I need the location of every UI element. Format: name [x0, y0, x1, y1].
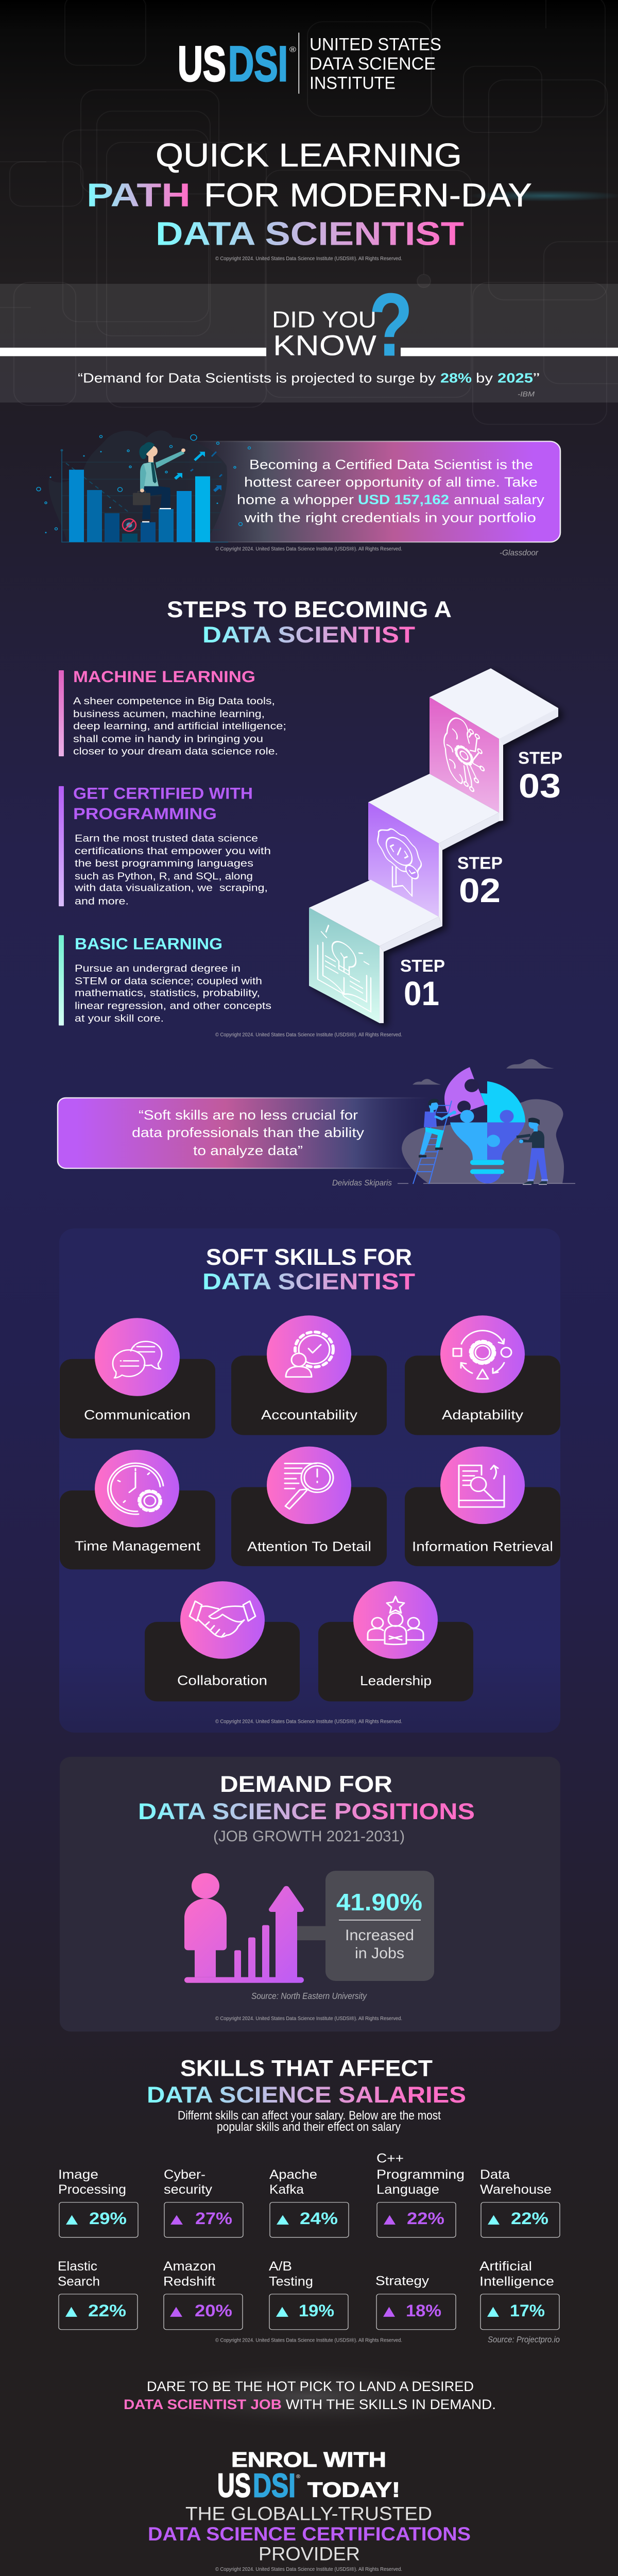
stat box: in Jobs: [355, 1944, 404, 1962]
skill: artificial intelligence 17%: [479, 2260, 559, 2330]
icon: clock with gear: [108, 1463, 163, 1514]
copyright: © Copyright 2024. United States Data Science Institute (USDSI®). All Rights Reserved.: [215, 2566, 402, 2572]
card: time management: [60, 1450, 215, 1569]
icon: brain circuit: [444, 710, 484, 798]
skill: elastic search 22%: 22%: [88, 2302, 126, 2320]
card: adaptability: [405, 1315, 560, 1435]
skill: artificial intelligence 17%: Intelligence: [479, 2275, 554, 2289]
skill: c++ programming language 22%: 22%: [407, 2210, 444, 2228]
person standing: [517, 1118, 548, 1184]
text block: machine learning: [59, 667, 286, 757]
skill: artificial intelligence 17%: 17%: [510, 2302, 545, 2320]
step 01 block: [309, 880, 442, 1023]
skill: c++ programming language 22%: [376, 2152, 465, 2238]
text block: machine learning: A sheer competence in Big Data tools,: [73, 696, 275, 707]
skill: c++ programming language 22%: Programming: [376, 2168, 465, 2182]
panel: certified data scientist callout: [182, 442, 560, 542]
icon: gear with cycle arrows: [453, 1331, 511, 1379]
callout: dare to be the hot pick: DARE TO BE THE HOT PICK TO LAND A DESIRED: [147, 2379, 474, 2394]
card: information retrieval: [405, 1447, 560, 1566]
institute name: [310, 35, 441, 93]
callout: dare to be the hot pick: DATA SCIENTIST JOB: [124, 2397, 282, 2412]
text block: get certified with programming: such as Python, R, and SQL, along: [75, 871, 253, 882]
heading: demand: [138, 1771, 475, 1824]
text block: basic learning: mathematics, statistics, probability,: [75, 988, 260, 998]
skill: a/b testing 19%: [269, 2260, 348, 2330]
icon: question mark: ?: [369, 275, 413, 375]
label: step 02: 02: [459, 871, 501, 909]
skill: data warehouse 22%: Warehouse: [480, 2183, 552, 2197]
heading: skills that affect salaries: DATA SCIENCE SALARIES: [147, 2082, 466, 2108]
heading: did you know: KNOW: [273, 330, 377, 362]
skill: data warehouse 22%: 22%: [511, 2210, 548, 2228]
logo mark: ®: [289, 46, 297, 54]
text block: machine learning: business acumen, machine learning,: [73, 709, 265, 720]
heading: soft skills for data scientist: [202, 1244, 415, 1294]
heading: did you know: [272, 307, 377, 362]
panel: demand for data science positions: [60, 1757, 560, 2031]
card: information retrieval: Information Retrieval: [412, 1539, 553, 1554]
illustration: puzzle light bulb: [398, 1059, 575, 1184]
text block: get certified with programming: the best programming languages: [75, 858, 253, 869]
skill: elastic search 22%: Search: [58, 2275, 100, 2289]
icon: team leader with star: [368, 1597, 423, 1645]
skill: cyber-security 27%: Cyber-: [164, 2168, 205, 2182]
title: FOR MODERN-DAY: [204, 177, 532, 214]
label: step 01: STEP: [400, 957, 445, 975]
panel: soft skills quote: [58, 1098, 432, 1168]
call to action: enrol with USDSI today: THE GLOBALLY-TRUSTED: [185, 2503, 432, 2524]
copyright: © Copyright 2024. United States Data Science Institute (USDSI®). All Rights Reserved.: [215, 2337, 402, 2343]
title: QUICK LEARNING: [156, 137, 462, 174]
heading: skills that affect salaries: [147, 2055, 466, 2108]
text block: basic learning: linear regression, and other concepts: [75, 1001, 271, 1011]
ladder: [413, 1100, 452, 1184]
callout text: home a whopper: [237, 493, 354, 507]
skill: amazon redshift 20%: Redshift: [163, 2275, 216, 2289]
bulb: [444, 1067, 525, 1183]
skill: image processing 29%: Image: [58, 2168, 98, 2182]
callout: dare to be the hot pick: [124, 2365, 496, 2428]
label: step 03: 03: [519, 767, 561, 805]
decorative dots: [37, 435, 250, 530]
illustration: career growth chart: [37, 430, 250, 542]
text block: skills intro: popular skills and their effect on salary: [217, 2120, 401, 2134]
person on ladder: [419, 1099, 456, 1158]
stat box: Increased: [345, 1926, 414, 1944]
quote: by: [476, 371, 493, 385]
heading: skills that affect salaries: SKILLS THAT AFFECT: [180, 2055, 433, 2081]
subheading: (JOB GROWTH 2021-2031): [213, 1827, 405, 1845]
label: step 02: STEP: [457, 854, 503, 873]
card: attention to detail: Attention To Detail: [247, 1539, 371, 1554]
copyright: © Copyright 2024. United States Data Science Institute (USDSI®). All Rights Reserved.: [215, 1032, 402, 1038]
card: communication: [60, 1318, 215, 1438]
label: step 01: 01: [404, 974, 439, 1012]
card: collaboration: Collaboration: [177, 1673, 267, 1688]
text block: get certified with programming: with data visualization, we scraping,: [74, 883, 268, 893]
source: Deividas Skiparis: Deividas Skiparis: [332, 1178, 392, 1188]
skill: a/b testing 19%: 19%: [299, 2302, 334, 2320]
skill: apache kafka 24%: Apache: [269, 2168, 317, 2182]
callout: dare to be the hot pick: WITH THE SKILLS IN DEMAND.: [286, 2397, 496, 2412]
background blob: [402, 1099, 564, 1183]
text block: get certified with programming: and more.: [75, 896, 129, 907]
call to action: enrol with USDSI today: TODAY!: [307, 2478, 400, 2501]
heading: steps to becoming a data scientist: DATA SCIENTIST: [202, 622, 415, 647]
skill: elastic search 22%: Elastic: [58, 2260, 97, 2274]
skill: image processing 29%: [58, 2168, 138, 2238]
logo mark: US: [178, 37, 226, 92]
skill: apache kafka 24%: 24%: [300, 2210, 338, 2228]
logo: USDSI small: [217, 2467, 300, 2504]
quote: “Demand for Data Scientists is projected to surge by: [78, 371, 436, 385]
quote: 2025: [497, 371, 533, 385]
institute name: DATA SCIENCE: [310, 54, 436, 74]
skill: elastic search 22%: [58, 2260, 138, 2330]
label: step 03: [518, 749, 562, 805]
card: leadership: [318, 1581, 473, 1701]
copyright: © Copyright 2024. United States Data Science Institute (USDSI®). All Rights Reserved.: [215, 546, 402, 552]
text block: skills intro: [178, 2109, 441, 2134]
icon: handshake: [190, 1601, 255, 1637]
clouds: [413, 1059, 554, 1084]
step 03 block: [430, 668, 558, 821]
logo: USDSI small: DSI: [253, 2467, 296, 2504]
quote text: data professionals than the ability: [132, 1125, 365, 1140]
skill: c++ programming language 22%: C++: [376, 2152, 404, 2165]
heading: steps to becoming a data scientist: STEPS TO BECOMING A: [167, 597, 452, 622]
logo: USDSI small: ®: [296, 2473, 300, 2480]
source: Projectpro.io: Source: Projectpro.io: [488, 2334, 560, 2344]
title: [87, 137, 532, 252]
text block: basic learning: [59, 935, 271, 1025]
skill: data warehouse 22%: Data: [480, 2168, 510, 2182]
heading: soft skills for data scientist: DATA SCIENTIST: [202, 1269, 415, 1294]
heading: demand: DATA SCIENCE POSITIONS: [138, 1799, 475, 1824]
skill: apache kafka 24%: Kafka: [269, 2183, 304, 2197]
skill: amazon redshift 20%: [163, 2260, 243, 2330]
text block: skills intro: Differnt skills can affect your salary. Below are the most: [178, 2109, 441, 2123]
source: Source: North Eastern University: [251, 1991, 368, 2001]
icon: book and light bulb: [318, 919, 371, 1012]
card: communication: Communication: [84, 1408, 191, 1422]
logo: USDSI small: US: [217, 2467, 251, 2504]
card: accountability: Accountability: [261, 1408, 358, 1422]
bars: [69, 470, 210, 542]
heading: steps to becoming a data scientist: [167, 597, 452, 647]
quote: ”: [533, 371, 540, 385]
institute name: UNITED STATES: [310, 35, 441, 54]
skill: data warehouse 22%: [480, 2168, 560, 2238]
skill: cyber-security 27%: [164, 2168, 243, 2238]
callout text: annual salary: [454, 493, 545, 507]
text block: get certified with programming: GET CERTIFIED WITH: [73, 784, 253, 802]
text block: machine learning: shall come in handy in bringing you: [73, 734, 263, 744]
skill: strategy 18%: 18%: [406, 2302, 441, 2320]
chart: isometric staircase: [309, 668, 558, 1023]
call to action: enrol with USDSI today: DATA SCIENCE CERTIFICATIONS: [148, 2524, 471, 2545]
source: Glassdoor: -Glassdoor: [500, 548, 539, 557]
arrows: [175, 452, 222, 491]
text block: get certified with programming: certifications that empower you with: [75, 846, 271, 857]
title: PATH: [87, 177, 191, 214]
heading: soft skills for data scientist: SOFT SKILLS FOR: [206, 1244, 412, 1270]
quote text: to analyze data”: [193, 1143, 303, 1158]
icon: chat bubbles: [113, 1342, 162, 1378]
text block: get certified with programming: Earn the most trusted data science: [75, 833, 258, 844]
panel: soft skills: [59, 1228, 560, 1733]
man climbing: [133, 442, 185, 522]
callout text: Becoming a Certified Data Scientist is the: [249, 457, 533, 472]
card: accountability: [231, 1315, 387, 1435]
panel: did you know: [0, 275, 618, 402]
text block: get certified with programming: [59, 784, 271, 907]
skill: a/b testing 19%: A/B: [269, 2260, 292, 2274]
text block: basic learning: STEM or data science; coupled with: [75, 976, 262, 987]
card: time management: Time Management: [75, 1539, 201, 1553]
skill: apache kafka 24%: [269, 2168, 349, 2238]
skill: amazon redshift 20%: Amazon: [163, 2260, 216, 2274]
skill: cyber-security 27%: security: [164, 2183, 212, 2197]
card: collaboration: [145, 1581, 300, 1701]
step 02 block: [368, 774, 499, 926]
icon: certificate badge: [377, 821, 421, 903]
card: attention to detail: [231, 1447, 387, 1566]
skill: artificial intelligence 17%: Artificial: [479, 2260, 532, 2274]
copyright: © Copyright 2024. United States Data Science Institute (USDSI®). All Rights Reserved.: [215, 2016, 402, 2022]
source: IBM: -IBM: [518, 391, 535, 398]
icon: person and rising bars: [184, 1873, 304, 1983]
icon: person and gear check: [286, 1332, 333, 1377]
callout text: hottest career opportunity of all time. Take: [244, 475, 538, 489]
skill: strategy 18%: Strategy: [375, 2274, 429, 2288]
card: leadership: Leadership: [360, 1673, 432, 1688]
stat box: [297, 1871, 434, 1981]
skill: image processing 29%: 29%: [89, 2210, 127, 2228]
copyright: © Copyright 2024. United States Data Science Institute (USDSI®). All Rights Reserved.: [215, 256, 402, 262]
logo mark: DSI: [228, 37, 288, 92]
icon: virus blocked: [123, 519, 136, 531]
quote text: “Soft skills are no less crucial for: [139, 1108, 358, 1123]
label: step 02: [457, 854, 503, 909]
label: step 01: [400, 957, 445, 1012]
callout text: [237, 457, 545, 525]
logo: USDSI United States Data Science Institute: [178, 32, 441, 94]
icon: magnifier with exclamation: [285, 1463, 333, 1509]
icon: laptop document search: [459, 1465, 504, 1507]
text block: basic learning: BASIC LEARNING: [75, 935, 222, 953]
text block: basic learning: at your skill core.: [75, 1013, 164, 1024]
heading: did you know: DID YOU: [272, 307, 376, 332]
callout text: with the right credentials in your portfolio: [244, 511, 536, 525]
skill: strategy 18%: [375, 2274, 456, 2330]
skill: cyber-security 27%: 27%: [195, 2210, 232, 2228]
skill: a/b testing 19%: Testing: [269, 2275, 313, 2289]
text block: machine learning: MACHINE LEARNING: [73, 667, 255, 686]
logo mark: [178, 37, 297, 92]
card: adaptability: Adaptability: [442, 1408, 524, 1422]
call to action: enrol with USDSI today: PROVIDER: [259, 2544, 360, 2565]
heading: demand: DEMAND FOR: [220, 1771, 392, 1797]
title: DATA SCIENTIST: [156, 215, 464, 252]
label: step 03: STEP: [518, 749, 562, 768]
callout text: USD 157,162: [358, 493, 449, 507]
institute name: INSTITUTE: [310, 73, 396, 93]
text block: get certified with programming: PROGRAMMING: [73, 804, 217, 823]
call to action: enrol with USDSI today: ENROL WITH: [231, 2448, 386, 2471]
skill: amazon redshift 20%: 20%: [195, 2302, 232, 2320]
quote text: [132, 1108, 365, 1158]
copyright: © Copyright 2024. United States Data Science Institute (USDSI®). All Rights Reserved.: [215, 1719, 402, 1725]
skill: c++ programming language 22%: Language: [376, 2183, 439, 2197]
stat box: 41.90%: [336, 1890, 422, 1916]
text block: basic learning: Pursue an undergrad degree in: [75, 963, 241, 974]
text block: machine learning: closer to your dream data science role.: [73, 746, 278, 757]
call to action: enrol with USDSI today: [148, 2448, 471, 2565]
quote: 28%: [440, 371, 472, 385]
skill: image processing 29%: Processing: [58, 2183, 126, 2197]
text block: machine learning: deep learning, and artificial intelligence;: [73, 721, 286, 732]
